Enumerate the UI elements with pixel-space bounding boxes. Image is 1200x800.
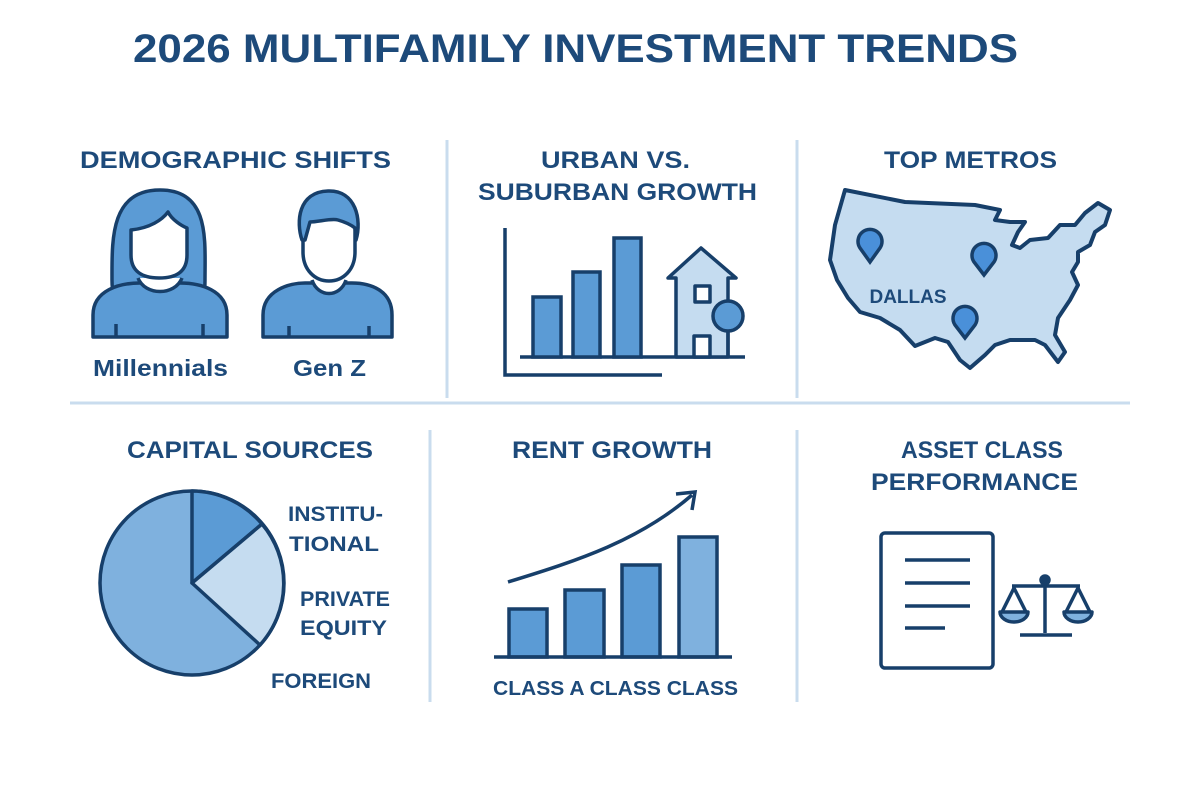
heading: asset class performance: ASSET CLASS	[901, 437, 1063, 464]
heading: urban vs suburban: SUBURBAN GROWTH	[478, 179, 757, 206]
pie labels: INSTITU-	[288, 503, 383, 526]
panel: capital sources: EQUITY	[300, 617, 387, 640]
labels: classes: CLASS A CLASS CLASS	[493, 678, 738, 700]
heading: rent growth: RENT GROWTH	[512, 437, 712, 464]
label: millennials: Millennials	[93, 355, 228, 381]
panel: rent growth	[493, 437, 738, 700]
icon: scales	[1000, 575, 1092, 635]
panel: capital sources: TIONAL	[289, 533, 379, 556]
panel: top metros	[830, 147, 1110, 368]
icon: house and tree	[668, 248, 743, 357]
panel: capital sources: FOREIGN	[271, 670, 371, 693]
heading: capital sources: CAPITAL SOURCES	[127, 437, 373, 464]
bar chart	[505, 228, 745, 375]
heading: top metros: TOP METROS	[884, 147, 1057, 174]
icon: man	[263, 191, 392, 337]
label: gen z: Gen Z	[293, 355, 366, 381]
bar chart with arrow	[494, 492, 732, 657]
icon: document	[881, 533, 993, 668]
heading: urban vs suburban: URBAN VS.	[541, 147, 690, 174]
heading: asset class performance: PERFORMANCE	[871, 469, 1078, 496]
label: dallas: DALLAS	[869, 287, 947, 308]
panel: urban vs suburban growth	[478, 147, 757, 375]
panel: capital sources	[100, 437, 390, 693]
heading: demographic shifts: DEMOGRAPHIC SHIFTS	[80, 147, 391, 174]
title: 2026 MULTIFAMILY INVESTMENT TRENDS	[133, 27, 1018, 71]
icon: US map	[830, 190, 1110, 368]
icon: woman	[93, 190, 227, 337]
panel: demographic shifts	[80, 147, 392, 381]
panel: asset class performance	[871, 437, 1092, 668]
panel: capital sources: PRIVATE	[300, 588, 390, 611]
pie chart	[100, 491, 284, 675]
icon: map pins	[858, 229, 996, 338]
